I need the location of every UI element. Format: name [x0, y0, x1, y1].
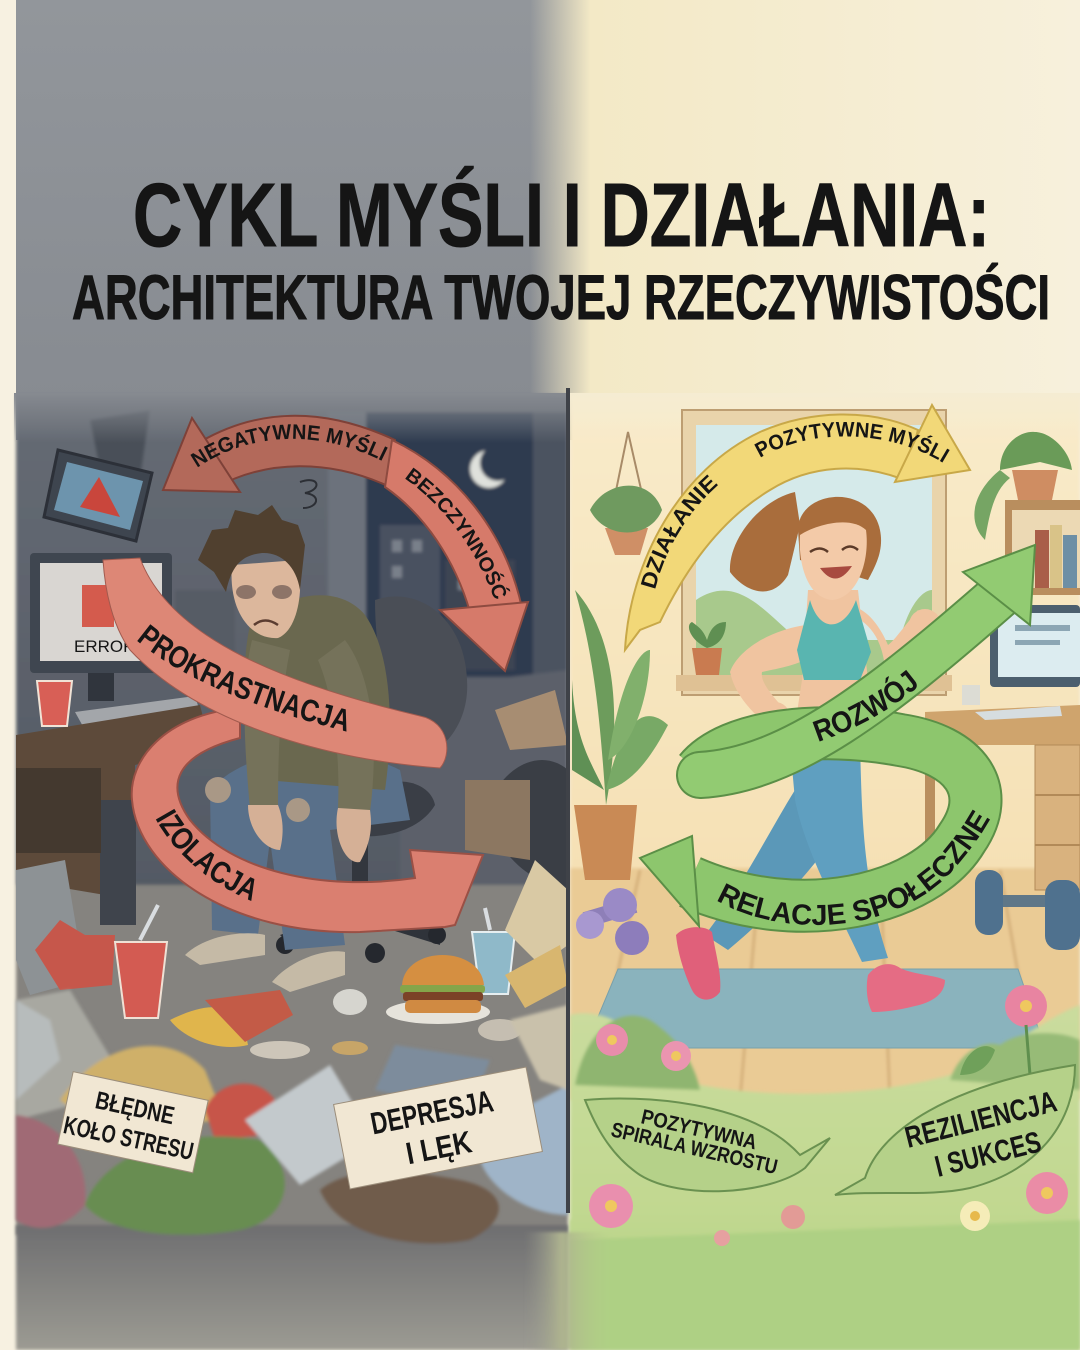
arrow: procrastination band: [102, 558, 448, 768]
exercise mat: [585, 969, 1045, 1048]
front leg: [790, 745, 888, 962]
panel: negative scene: [13, 393, 570, 1350]
bookshelf: [1005, 500, 1080, 595]
rubbish pile: [16, 990, 568, 1350]
arrow: action and positive thoughts: POZYTYWNE MYŚLI: [754, 422, 950, 462]
icon: hanging plant: [590, 432, 662, 555]
hair: [730, 492, 800, 591]
dark room wall: [16, 395, 568, 1235]
arrow: action and positive thoughts: DZIAŁANIE: [640, 474, 718, 588]
trash bag: [465, 690, 568, 890]
bright room wall: [570, 395, 1080, 1350]
arrow: negative thoughts: NEGATYWNE MYŚLI: [190, 424, 388, 468]
divider line: [566, 388, 570, 1213]
arrow: growth and social relations spiral: ROZWÓJ: [812, 670, 917, 742]
man sitting slumped: [185, 505, 410, 992]
arrow: action and positive thoughts: [624, 403, 972, 654]
hair: [198, 505, 305, 592]
rear shoe: [676, 927, 720, 1000]
arrow: procrastination band: PROKRASTNACJA: [137, 624, 346, 732]
panel: positive scene: [532, 393, 1080, 1350]
arrow: growth and social relations spiral: RELACJE SPOŁECZNE: [718, 810, 990, 926]
icon: drink cup on desk: [37, 681, 72, 726]
label: depression and anxiety: I LĘK: [403, 1124, 475, 1171]
leaf label: resilience and success: [835, 1065, 1075, 1195]
leaf label: positive growth spiral: [585, 1099, 830, 1191]
icon: confused squiggle: [300, 480, 316, 508]
arrow: inaction: BEZCZYNNOŚĆ: [405, 468, 510, 599]
garden: [525, 1005, 1080, 1350]
arrow: lower spiral isolation: [130, 711, 484, 934]
arrow: lower spiral isolation: IZOLACJA: [156, 808, 254, 901]
icon: burger: [386, 955, 490, 1024]
icon: dumbbell: [975, 870, 1080, 950]
title: [72, 165, 1050, 333]
window: [676, 410, 952, 695]
label: depression and anxiety: [334, 1067, 542, 1189]
back leg: [705, 790, 845, 950]
leaf label: positive growth spiral: SPIRALA WZROSTU: [609, 1118, 780, 1179]
icon: potted plant on sill: [689, 622, 726, 675]
icon: hanging plant right: [974, 432, 1072, 540]
arms: [245, 640, 290, 810]
arrow: negative thoughts: [162, 414, 396, 493]
icon: error computer: [30, 553, 200, 730]
floor trash: cups and food: [16, 860, 568, 1059]
desk: [16, 705, 210, 925]
woman running: [676, 492, 945, 1012]
label: depression and anxiety: DEPRESJA: [368, 1083, 496, 1141]
label: vicious stress cycle: [58, 1072, 208, 1173]
arms: [730, 625, 812, 726]
leaf label: positive growth spiral: POZYTYWNA: [639, 1105, 759, 1154]
desk and computer: [925, 605, 1080, 890]
icon: purple dumbbells: [576, 888, 649, 955]
front shoe: [867, 964, 945, 1012]
torso: [245, 595, 390, 790]
shoes: [185, 933, 265, 965]
arrow: growth and social relations spiral: [638, 544, 1036, 933]
icon: tall floor plant: [572, 590, 668, 880]
arrow: inaction: [384, 438, 530, 673]
office chair: [276, 597, 467, 963]
leaf label: resilience and success: I SUKCES: [932, 1126, 1044, 1184]
face: [800, 522, 867, 600]
label: vicious stress cycle: KOŁO STRESU: [61, 1111, 196, 1166]
icon: error computer: ERROR: [74, 637, 135, 656]
label: vicious stress cycle: BŁĘDNE: [93, 1086, 177, 1130]
torso: [792, 590, 868, 745]
icon: wall monitor with warning: [44, 450, 152, 541]
face: [232, 560, 300, 638]
icons: flowers: [589, 985, 1068, 1246]
legs: [210, 751, 410, 950]
